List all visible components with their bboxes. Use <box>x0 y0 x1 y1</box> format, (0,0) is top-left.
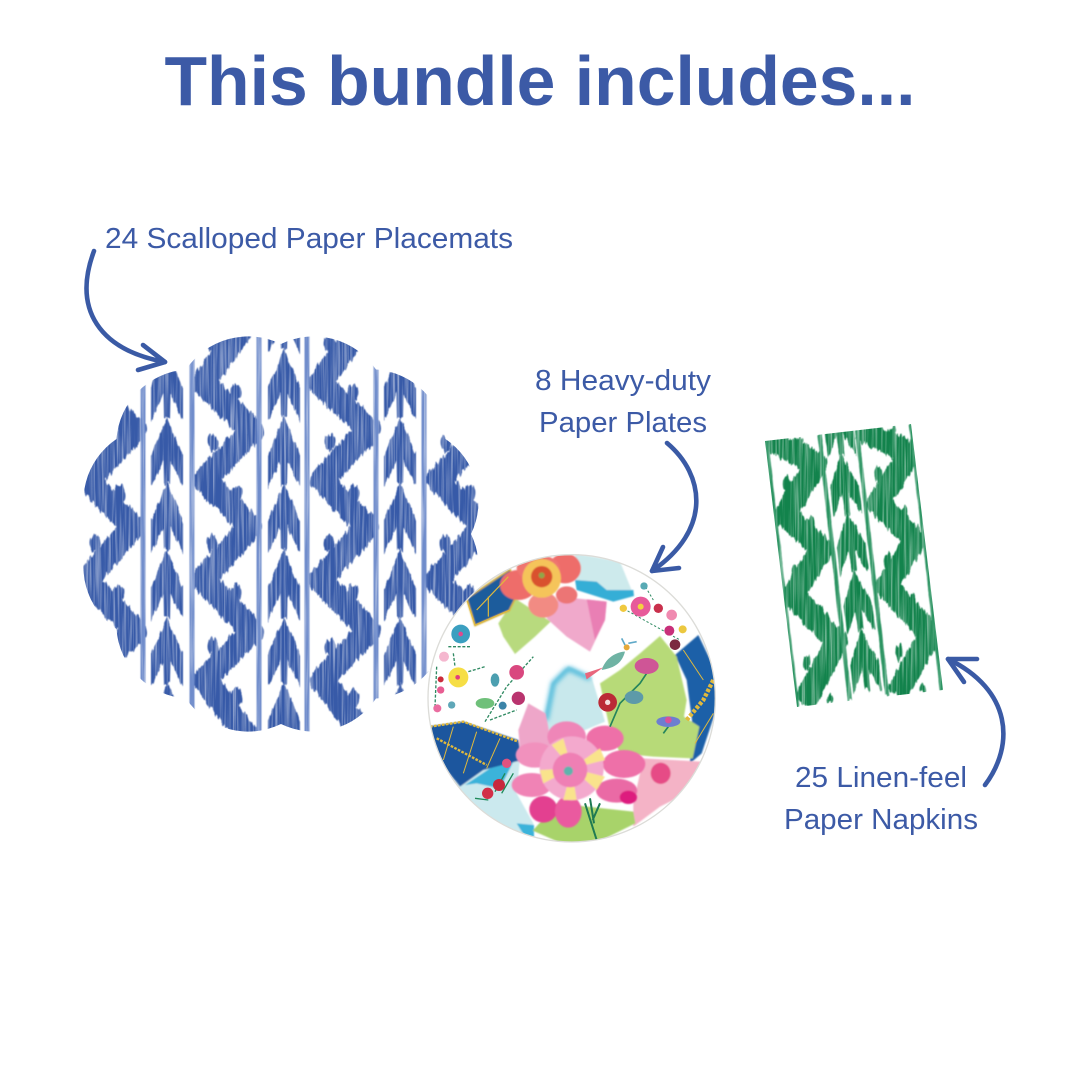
right floral sprigs <box>620 582 687 650</box>
large green leaf <box>600 636 699 758</box>
small red flowers bottom-left <box>475 759 513 800</box>
label: napkins <box>784 762 978 836</box>
pale blue leaf top-right <box>574 556 632 591</box>
bird <box>585 638 637 679</box>
blue leaf bottom-left <box>427 722 522 787</box>
blue leaf top-left <box>467 569 519 626</box>
label: napkins: Paper Napkins <box>784 804 978 836</box>
green stripes <box>766 423 942 708</box>
green leaf bottom <box>533 803 635 843</box>
label: plates: 8 Heavy-duty <box>535 365 712 397</box>
label: plates: Paper Plates <box>539 407 707 439</box>
stems <box>585 798 600 840</box>
panel: floral paper plate <box>427 553 717 843</box>
ikat chevron columns <box>151 283 416 753</box>
pink leaf top <box>547 597 607 652</box>
ikat zigzag columns <box>86 320 485 740</box>
label: placemats: 24 Scalloped Paper Placemats <box>105 223 513 255</box>
pale blue leaf centre <box>544 666 605 743</box>
green chevron column <box>824 430 883 694</box>
title: This bundle includes... <box>164 42 916 120</box>
plate rim <box>428 555 715 842</box>
arrow: to napkin <box>948 659 1003 785</box>
big pink peony <box>512 721 645 828</box>
label: plates <box>535 365 712 439</box>
flowers on green leaf <box>598 658 680 733</box>
bottom-left pale blue watercolor <box>453 758 533 840</box>
left floral sprigs <box>433 625 533 722</box>
green leaf top <box>498 598 551 654</box>
panel: green ikat napkin <box>766 393 942 708</box>
thin vertical stripes <box>143 320 424 750</box>
bottom-right pink watercolor <box>633 758 702 827</box>
green zigzag columns <box>767 428 930 705</box>
green dots <box>783 426 926 704</box>
arrow: to placemat <box>87 251 165 370</box>
coral flower <box>500 553 581 618</box>
arrow: to plate <box>652 443 696 571</box>
blue leaf right <box>675 635 717 763</box>
gold leaf edges <box>430 577 713 773</box>
pink leaf left <box>518 703 552 748</box>
label: napkins: 25 Linen-feel <box>795 762 967 794</box>
panel: scalloped placemat <box>83 336 478 732</box>
